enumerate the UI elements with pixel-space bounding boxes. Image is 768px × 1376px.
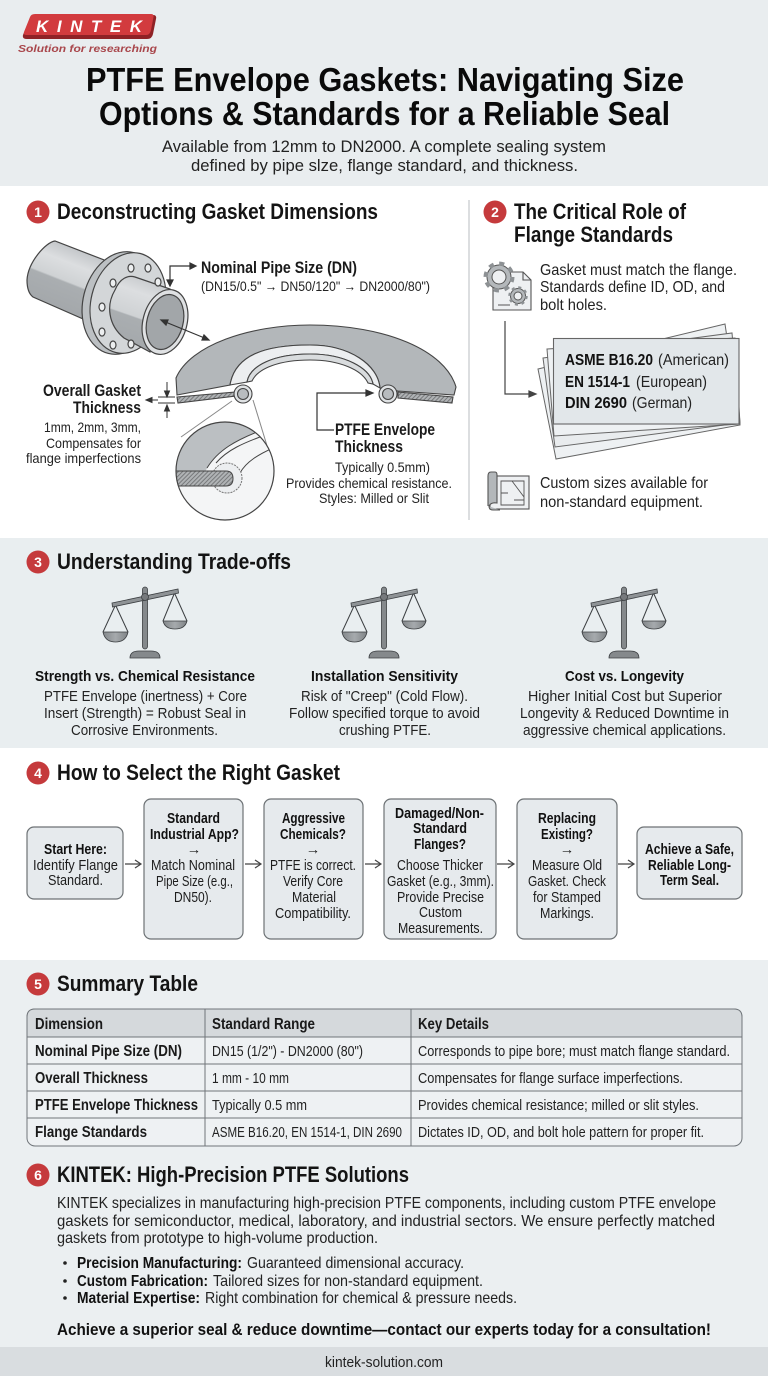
arrow 4 <box>497 860 514 868</box>
logo: Solution for researching <box>18 43 158 55</box>
stacked sheets: standards list: EN 1514-1 <box>565 374 630 391</box>
flow box: aggressive chemicals: Material <box>292 890 336 906</box>
flow box: aggressive chemicals: → <box>306 842 320 858</box>
trade-off 1 text: Strength vs. Chemical Resistance <box>35 668 255 685</box>
flow box: replacing existing: Measure Old <box>532 858 602 874</box>
flow box: standard application: Pipe Size (e.g., <box>156 874 233 890</box>
label: PTFE envelope thickness: Thickness <box>335 438 403 456</box>
heading 4: How to Select the Right Gasket <box>57 760 341 785</box>
row: flange standards: ASME B16.20, EN 1514-1, DIN 2690 <box>212 1125 402 1141</box>
flow box: start: Standard. <box>48 873 103 889</box>
row: flange standards <box>35 1124 704 1141</box>
panel: deconstructing gasket dimensions <box>26 199 456 525</box>
trade-off 3 text: aggressive chemical applications. <box>523 722 726 739</box>
flow box: damaged flanges: Flanges? <box>414 837 466 853</box>
row: overall thickness: 1 mm - 10 mm <box>212 1071 289 1087</box>
title: Options & Standards for a Reliable Seal <box>99 95 670 132</box>
lower background <box>0 960 768 1347</box>
stacked sheets: standards list: ASME B16.20 <box>565 352 653 369</box>
text: custom sizes <box>540 475 709 511</box>
label: PTFE envelope thickness: PTFE Envelope <box>335 421 435 439</box>
table header row: Key Details <box>418 1016 489 1033</box>
flow box: standard application: Industrial App? <box>150 827 239 843</box>
trade-off 3 text: Longevity & Reduced Downtime in <box>520 705 729 722</box>
text: gasket must match: bolt holes. <box>540 297 607 314</box>
heading 2: Flange Standards <box>514 222 673 247</box>
arrow: PTFE envelope <box>317 390 373 430</box>
flow box: damaged flanges: Gasket (e.g., 3mm). <box>387 874 494 890</box>
heading 6: 6 <box>34 1167 42 1183</box>
row: overall thickness <box>35 1070 683 1087</box>
header band <box>0 0 768 186</box>
panel: flange standards <box>484 199 740 511</box>
icon: balance scale 3 <box>582 587 666 658</box>
heading 5: Summary Table <box>57 971 198 996</box>
stacked sheets: standards list: (European) <box>636 374 707 391</box>
trade-off 3 text: Cost vs. Longevity <box>565 668 685 685</box>
table header row: Dimension <box>35 1016 103 1033</box>
row: PTFE envelope thickness: PTFE Envelope Thickness <box>35 1097 198 1114</box>
illustration: pipe and flange <box>27 241 195 363</box>
heading 1: 1 <box>34 204 42 220</box>
row: PTFE envelope thickness: Typically 0.5 mm <box>212 1098 307 1114</box>
bullet list: Guaranteed dimensional accuracy. <box>247 1255 464 1272</box>
arrow 1 <box>125 860 141 868</box>
label: overall gasket thickness: Compensates for <box>46 435 141 451</box>
stacked sheets: standards list: DIN 2690 <box>565 395 627 412</box>
flow box: replacing existing: Markings. <box>540 906 594 922</box>
paragraph <box>57 1195 716 1247</box>
flow box: replacing existing: → <box>560 842 574 858</box>
flow box: aggressive chemicals: Compatibility. <box>275 906 351 922</box>
label: PTFE envelope thickness: Styles: Milled or Slit <box>319 490 429 506</box>
logo <box>18 14 158 55</box>
label: PTFE envelope thickness: Typically 0.5mm) <box>335 459 430 475</box>
flow box: start <box>27 827 123 899</box>
flow box: replacing existing <box>517 799 617 939</box>
heading 3: 3 <box>34 554 42 570</box>
trade-off 3 text <box>520 668 729 739</box>
label: nominal pipe size: (DN15/0.5" → DN50/120" → DN2000/80") <box>201 278 430 294</box>
bullet list: Tailored sizes for non-standard equipment. <box>213 1273 483 1290</box>
heading 4: 4 <box>34 765 42 781</box>
label: PTFE envelope thickness <box>286 421 452 506</box>
flow box: damaged flanges: Standard <box>413 821 467 837</box>
arrow: to standards <box>505 321 536 397</box>
text: custom sizes: non-standard equipment. <box>540 494 703 511</box>
arrow: bore to gasket <box>161 320 209 340</box>
flow box: outcome <box>637 827 742 899</box>
flow box: aggressive chemicals <box>264 799 363 939</box>
heading 3: Understanding Trade-offs <box>57 549 291 574</box>
stacked sheets: standards list: (German) <box>632 395 692 412</box>
heading 5: 5 <box>34 976 42 992</box>
flow box: aggressive chemicals: PTFE is correct. <box>270 858 356 874</box>
trade-off 3 text: Higher Initial Cost but Superior <box>528 688 722 705</box>
label: overall gasket thickness: Thickness <box>73 399 141 417</box>
stacked sheets: standards list <box>538 324 740 459</box>
trade-off 1 text <box>35 668 255 739</box>
row: nominal pipe size: Corresponds to pipe bore; must match flange standard. <box>418 1044 730 1060</box>
flow box: standard application <box>144 799 243 939</box>
bullet list <box>63 1255 517 1307</box>
trade-off 2 text <box>289 668 480 739</box>
title: PTFE Envelope Gaskets: Navigating Size <box>86 61 684 98</box>
icon: gears and document <box>486 264 531 310</box>
row: PTFE envelope thickness <box>35 1097 699 1114</box>
row: overall thickness: Overall Thickness <box>35 1070 148 1087</box>
panel: understanding trade-offs <box>0 538 768 748</box>
text: gasket must match: Standards define ID, OD, and <box>540 279 725 296</box>
flow box: replacing existing: Gasket. Check <box>528 874 607 890</box>
stacked sheets: standards list: (American) <box>658 352 729 369</box>
flow box: damaged flanges: Custom <box>419 905 462 921</box>
flow box: aggressive chemicals: Chemicals? <box>280 827 346 843</box>
label: overall gasket thickness <box>26 382 141 466</box>
label: nominal pipe size: Nominal Pipe Size (DN) <box>201 259 357 277</box>
subtitle: defined by pipe slze, flange standard, and thickness. <box>191 156 578 175</box>
panel: how to select the right gasket <box>26 760 742 939</box>
table header row <box>35 1016 489 1033</box>
bullet list: Material Expertise: <box>77 1290 200 1307</box>
flow box: outcome: Achieve a Safe, <box>645 842 734 858</box>
divider <box>468 200 470 520</box>
flow box: aggressive chemicals: Verify Core <box>283 874 343 890</box>
illustration: gasket cutaway <box>176 325 456 403</box>
trade-off 1 text: PTFE Envelope (inertness) + Core <box>44 688 247 705</box>
row: nominal pipe size: Nominal Pipe Size (DN) <box>35 1043 182 1060</box>
flow box: standard application: DN50). <box>174 890 212 906</box>
table <box>27 1009 742 1146</box>
label: PTFE envelope thickness: Provides chemical resistance. <box>286 475 452 491</box>
label: overall gasket thickness: Overall Gasket <box>43 382 141 400</box>
paragraph: gaskets from prototype to high-volume production. <box>57 1230 378 1247</box>
arrow: nominal pipe size <box>167 263 196 286</box>
label: overall gasket thickness: flange imperfections <box>26 450 141 466</box>
bullet list: Custom Fabrication: <box>77 1273 208 1290</box>
trade-off 2 text: Installation Sensitivity <box>311 668 459 685</box>
flow box: aggressive chemicals: Aggressive <box>282 811 345 827</box>
row: flange standards: Flange Standards <box>35 1124 147 1141</box>
footer: kintek-solution.com <box>325 1354 443 1371</box>
flow box: replacing existing: Existing? <box>541 827 593 843</box>
flow box: outcome: Term Seal. <box>660 873 719 889</box>
row: nominal pipe size: DN15 (1/2") - DN2000 (80") <box>212 1044 363 1060</box>
label: nominal pipe size <box>201 259 430 294</box>
row: nominal pipe size <box>35 1043 730 1060</box>
heading 2: The Critical Role of <box>514 199 687 224</box>
heading 6: KINTEK: High-Precision PTFE Solutions <box>57 1162 409 1187</box>
panel: summary table <box>26 971 742 1146</box>
subtitle <box>162 137 606 175</box>
table header row: Standard Range <box>212 1016 315 1033</box>
title <box>86 61 684 132</box>
bullet list: Precision Manufacturing: <box>77 1255 242 1272</box>
label: overall gasket thickness: 1mm, 2mm, 3mm, <box>44 419 141 435</box>
icon: balance scale 2 <box>342 587 426 658</box>
trade-off 1 text: Corrosive Environments. <box>71 722 218 739</box>
flow box: damaged flanges: Damaged/Non- <box>395 806 484 822</box>
row: flange standards: Dictates ID, OD, and bolt hole pattern for proper fit. <box>418 1125 704 1141</box>
text: custom sizes: Custom sizes available for <box>540 475 709 492</box>
arrow: thickness dimension <box>146 382 175 418</box>
trade-off 1 text: Insert (Strength) = Robust Seal in <box>44 705 246 722</box>
flow box: damaged flanges: Choose Thicker <box>397 858 483 874</box>
row: overall thickness: Compensates for flange surface imperfections. <box>418 1071 683 1087</box>
flow box: damaged flanges <box>384 799 496 939</box>
flow box: standard application: → <box>187 842 201 858</box>
trade-off 2 text: Risk of "Creep" (Cold Flow). <box>301 688 468 705</box>
flow box: standard application: Standard <box>167 811 220 827</box>
heading 1: Deconstructing Gasket Dimensions <box>57 199 378 224</box>
logo: KINTEK <box>36 17 144 36</box>
flow box: replacing existing: Replacing <box>538 811 596 827</box>
trade-off 2 text: crushing PTFE. <box>339 722 431 739</box>
icon: blueprint <box>488 472 529 510</box>
paragraph: gaskets for semiconductor, medical, laboratory, and industrial sectors. We ensure perfectly matched <box>57 1213 715 1230</box>
subtitle: Available from 12mm to DN2000. A complete sealing system <box>162 137 606 156</box>
flow box: replacing existing: for Stamped <box>533 890 601 906</box>
text: gasket must match: Gasket must match the flange. <box>540 262 737 279</box>
flow box: outcome: Reliable Long- <box>648 858 731 874</box>
arrow 5 <box>618 860 634 868</box>
bullet list: Right combination for chemical & pressure needs. <box>205 1290 517 1307</box>
flow box: standard application: Match Nominal <box>151 858 235 874</box>
flow box: damaged flanges: Provide Precise <box>397 890 484 906</box>
flow box: start: Identify Flange <box>33 858 118 874</box>
heading 2 <box>484 199 687 247</box>
icon: balance scale 1 <box>103 587 187 658</box>
flow box: start: Start Here: <box>44 842 107 858</box>
call to action: Achieve a superior seal & reduce downtime—contact our experts today for a consultation! <box>57 1320 711 1339</box>
panel: KINTEK solutions <box>26 1162 716 1339</box>
arrow 3 <box>365 860 381 868</box>
callout: magnified gasket edge <box>175 400 275 521</box>
heading 2: 2 <box>491 204 499 220</box>
row: PTFE envelope thickness: Provides chemical resistance; milled or slit styles. <box>418 1098 699 1114</box>
flow box: damaged flanges: Measurements. <box>398 921 483 937</box>
trade-off 2 text: Follow specified torque to avoid <box>289 705 480 722</box>
arrow 2 <box>245 860 261 868</box>
footer <box>0 1347 768 1376</box>
text: gasket must match <box>540 262 737 314</box>
